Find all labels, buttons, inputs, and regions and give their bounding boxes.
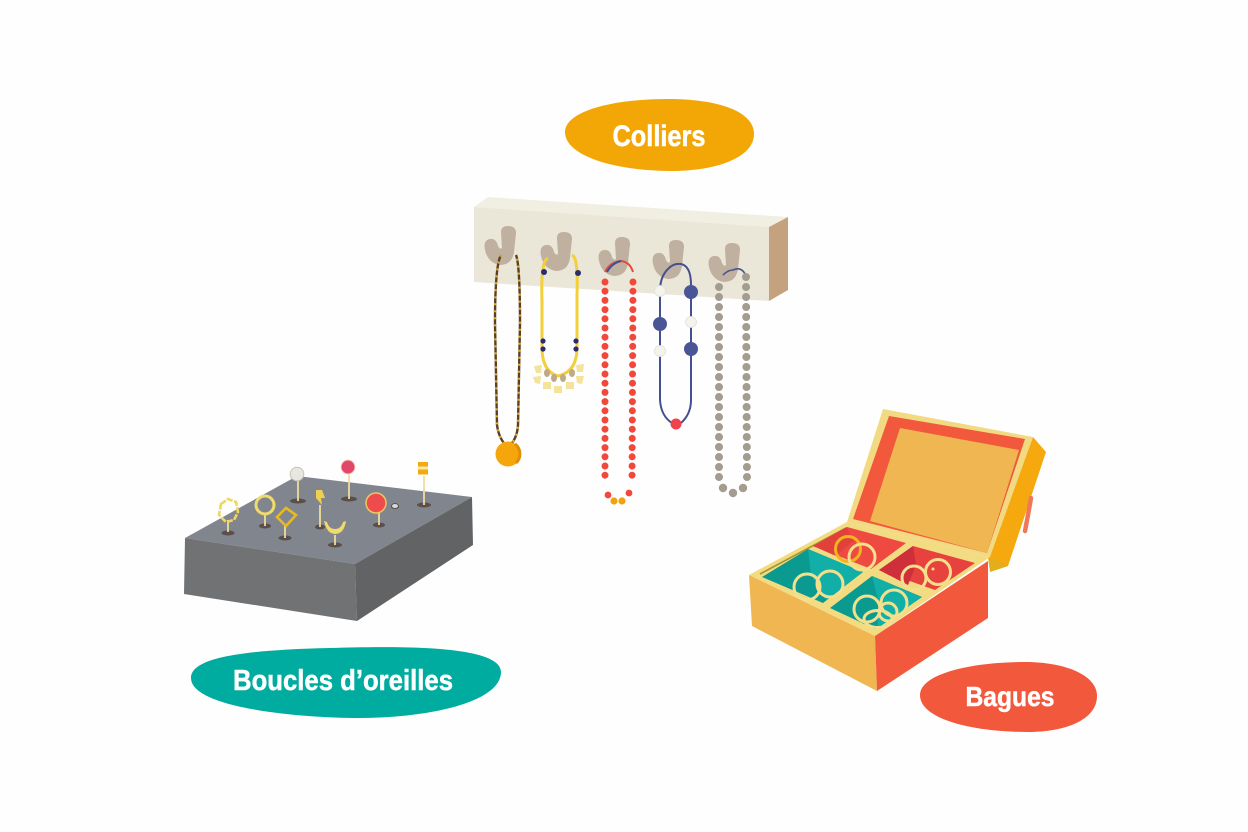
- clasp: [1025, 498, 1031, 531]
- label: Colliers: [565, 99, 754, 171]
- label: Bagues: Bagues: [966, 681, 1054, 712]
- earring: pink bead: [341, 460, 355, 474]
- compartment: red back right: [879, 546, 975, 590]
- stand bases: [222, 496, 431, 548]
- earring: star ring: [219, 499, 238, 522]
- earring: striped bar: [418, 462, 428, 474]
- compartment: teal front right: [830, 576, 922, 629]
- compartment: teal front left: [762, 549, 863, 603]
- stems: [228, 474, 424, 545]
- earring: zigzag: [316, 490, 325, 505]
- earring display block: [184, 460, 473, 621]
- earring: crescent: [324, 521, 346, 534]
- label: Bagues: [920, 662, 1097, 732]
- open ring box: [749, 409, 1046, 691]
- rings: [794, 536, 950, 628]
- lid: [847, 409, 1046, 572]
- label: Boucles d'oreilles: Boucles d’oreilles: [233, 665, 453, 697]
- earring: small stud: [392, 504, 398, 508]
- earring: plain ring: [256, 496, 274, 514]
- necklace: yellow beads with fringe: [533, 255, 584, 393]
- necklace: long red beads: [605, 261, 633, 505]
- earring: pearl: [290, 467, 304, 481]
- necklace: long grey beads: [719, 269, 747, 497]
- box faces: [749, 575, 877, 691]
- label: Colliers: Colliers: [612, 120, 706, 153]
- compartment: red back left: [813, 527, 906, 569]
- wall rack with hooks: [474, 197, 788, 301]
- label: Boucles d'oreilles: [191, 647, 501, 718]
- necklace: navy and white beads: [653, 264, 698, 430]
- earring: red disc: [366, 493, 386, 513]
- hooks: [485, 226, 740, 282]
- necklace: brown beads with orange pendant: [495, 255, 520, 466]
- box rim and dividers: [749, 522, 990, 636]
- earring: diamond ring: [277, 508, 296, 526]
- back-left inner edge: [760, 528, 846, 574]
